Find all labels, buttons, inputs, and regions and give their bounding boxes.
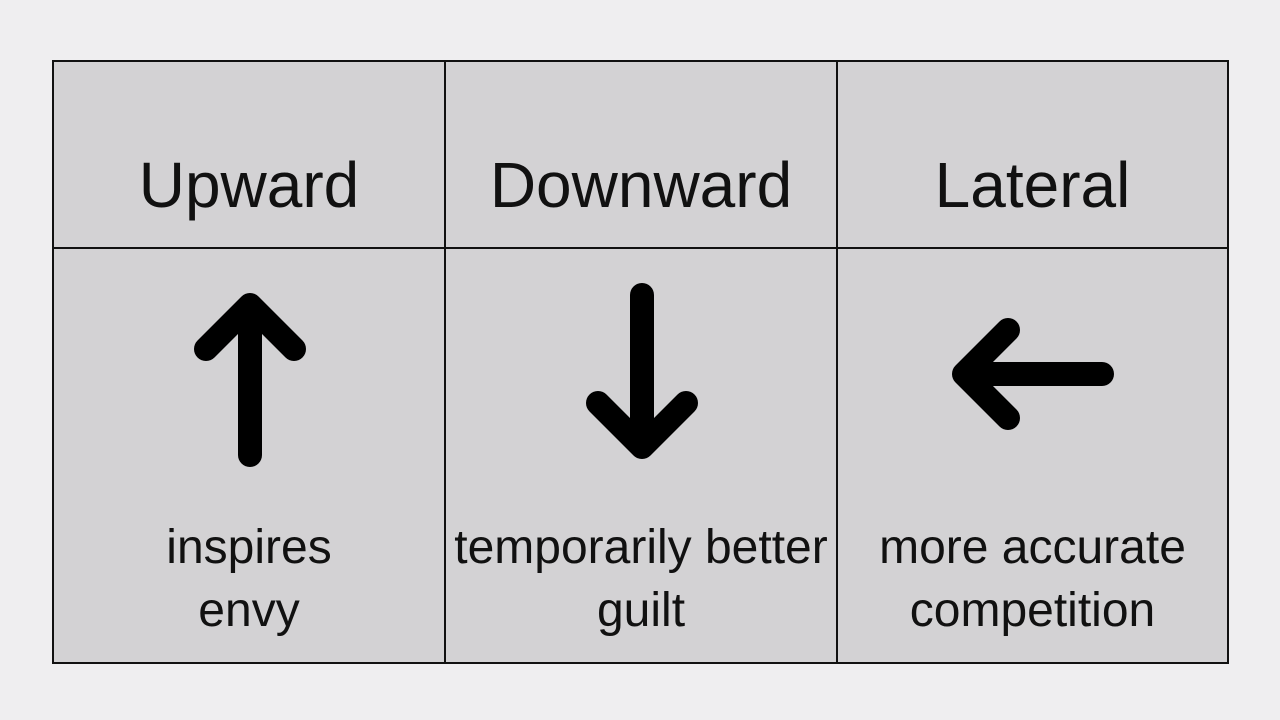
header: Lateral: Lateral: [935, 148, 1130, 220]
panel: upward: [52, 247, 446, 664]
text: inspires envy: envy: [198, 584, 300, 637]
text: inspires envy: [166, 521, 332, 637]
icon: down arrow: [586, 283, 698, 459]
header: Downward: [444, 60, 838, 249]
header: Upward: [52, 60, 446, 249]
text: more accurate competition: competition: [910, 584, 1155, 637]
icon: left arrow: [952, 318, 1114, 430]
icon: up arrow: [194, 293, 306, 467]
text: temporarily better guilt: [454, 521, 828, 637]
header: Upward: Upward: [139, 148, 359, 220]
header: Downward: Downward: [490, 148, 792, 220]
table: comparison types: [52, 60, 1229, 664]
text: more accurate competition: [879, 521, 1186, 637]
text: inspires envy: inspires: [166, 521, 332, 574]
text: temporarily better guilt: temporarily better: [454, 521, 828, 574]
panel: lateral: [836, 247, 1229, 664]
header: Lateral: [836, 60, 1229, 249]
panel: downward: [444, 247, 838, 664]
text: temporarily better guilt: guilt: [597, 584, 685, 637]
text: more accurate competition: more accurate: [879, 521, 1186, 574]
